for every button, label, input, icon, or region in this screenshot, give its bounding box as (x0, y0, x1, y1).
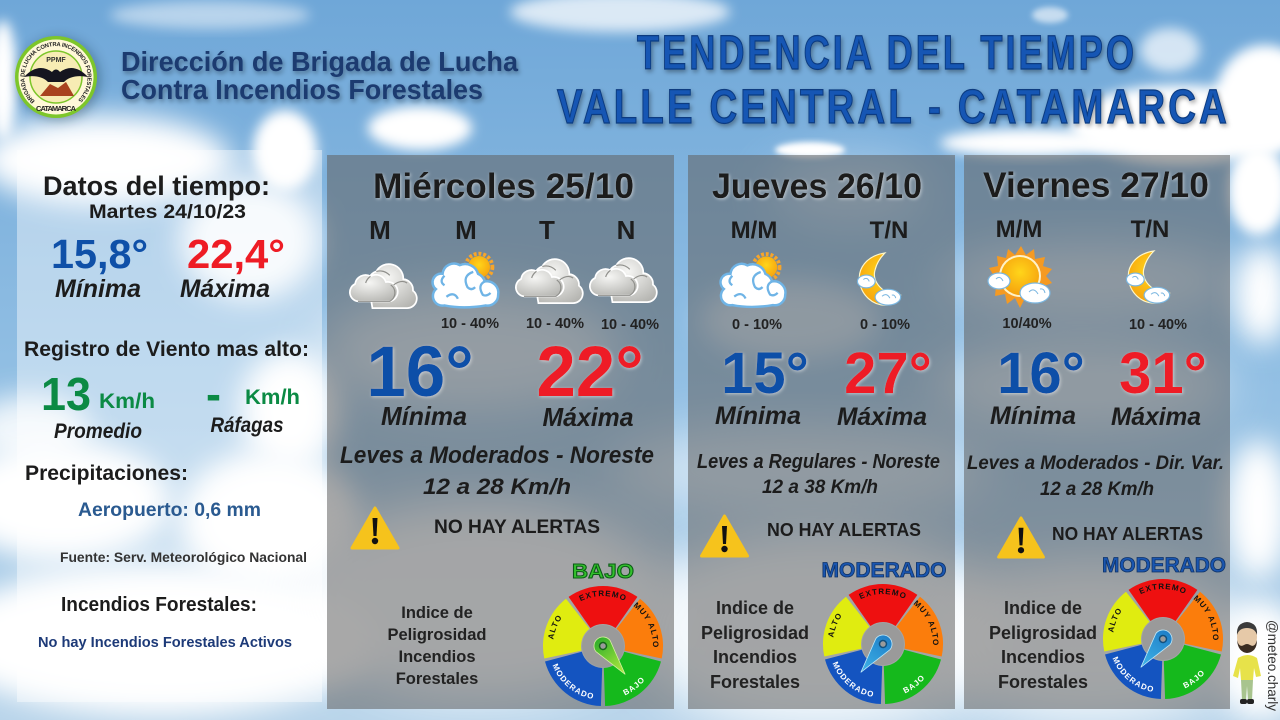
gauge: fire danger (822, 584, 943, 704)
icon: crescent moon (857, 253, 901, 305)
rain probabilities (1002, 316, 1187, 333)
icon: sun behind cloud (721, 254, 785, 307)
wind gusts (206, 368, 300, 437)
logo: brigade emblem: BRIGADA DE LUCHA CONTRA INCENDIOS FORESTALES (20, 42, 92, 104)
minimum temperature: Mínima (990, 402, 1076, 430)
rain probabilities (732, 317, 910, 333)
fire danger label (989, 598, 1097, 692)
icon: cloudy night (590, 258, 657, 302)
panel: Friday background (964, 155, 1230, 709)
wind forecast: 12 a 28 Km/h (423, 474, 571, 499)
wind gusts: - (206, 368, 221, 420)
heading: precipitation: Precipitaciones: (25, 461, 188, 485)
maximum temperature: 31° (1119, 341, 1207, 406)
fire danger label: Incendios (1001, 647, 1085, 667)
fire danger label: Indice de (1004, 598, 1082, 618)
panel: Jueves 26/10 (697, 167, 946, 704)
day heading: Viernes 27/10 (983, 166, 1209, 205)
gauge: fire danger: MODERADO (1112, 656, 1154, 692)
minimum temperature: Mínima (55, 275, 141, 303)
wind forecast: 12 a 38 Km/h (762, 477, 878, 498)
period labels: N (617, 215, 635, 245)
maximum temperature (180, 231, 285, 303)
gauge needle (854, 631, 896, 678)
fire danger label: Indice de (716, 598, 794, 618)
logo: brigade emblem (11, 32, 106, 127)
icon: cloudy morning (350, 264, 417, 308)
rain probabilities: 0 - 10% (732, 317, 782, 333)
gauge: fire danger: EXTREMO (858, 588, 906, 599)
heading: wind record: Registro de Viento mas alto: (24, 337, 309, 361)
panel: Miércoles 25/10 (340, 167, 663, 706)
fire danger label: Forestales (396, 670, 478, 688)
maximum temperature: 22,4° (187, 231, 285, 277)
gauge: fire danger: BAJO (1182, 670, 1204, 688)
period labels: M/M (731, 217, 777, 244)
panel: current weather data (17, 150, 322, 702)
rain probabilities: 0 - 10% (860, 317, 910, 333)
gauge: fire danger: MODERADO (552, 663, 594, 698)
period labels: T/N (1131, 216, 1169, 243)
fire danger label: Peligrosidad (387, 626, 487, 644)
rain probabilities (441, 316, 659, 333)
gauge: fire danger: MUY ALTO (634, 602, 658, 647)
maximum temperature: Máxima (1111, 403, 1201, 431)
panel: Viernes 27/10 (967, 166, 1226, 699)
gauge: fire danger (542, 586, 663, 706)
fire danger label (701, 598, 809, 692)
rain probabilities: 10 - 40% (1129, 317, 1187, 333)
maximum temperature (837, 341, 932, 431)
minimum temperature: Mínima (715, 402, 801, 430)
data source: Fuente: Serv. Meteorológico Nacional (60, 549, 307, 565)
icon: crescent moon (1126, 251, 1170, 303)
maximum temperature: Máxima (542, 402, 634, 432)
wind forecast: Leves a Moderados - Noreste (340, 442, 654, 469)
icon: warning triangle (999, 518, 1043, 557)
rain probabilities: 10 - 40% (526, 316, 584, 332)
gauge: fire danger: MUY ALTO (1194, 595, 1218, 640)
gauge: fire danger: BAJO (622, 678, 644, 696)
icon: cartoon meteorologist (1233, 622, 1261, 704)
gauge needle (1134, 626, 1176, 673)
gauge: fire danger: BAJO (902, 676, 924, 694)
average wind: Km/h (99, 390, 155, 413)
rain probabilities: 10/40% (1002, 316, 1052, 332)
average wind (41, 368, 155, 443)
period labels: M/M (996, 216, 1042, 243)
rain probabilities: 10 - 40% (441, 316, 499, 332)
icon: cloudy afternoon (516, 259, 583, 303)
gauge: fire danger: ALTO (828, 614, 841, 638)
minimum temperature: 15,8° (51, 231, 148, 277)
wind gusts: Km/h (245, 386, 300, 409)
maximum temperature (1111, 341, 1207, 431)
danger level: moderado: MODERADO (822, 559, 946, 582)
fire danger label: Forestales (998, 672, 1088, 692)
heading: organisation name: Dirección de Brigada de Lucha (121, 46, 519, 77)
heading: organisation name (121, 46, 519, 105)
minimum temperature: 15° (721, 341, 809, 406)
heading: forest fires: Incendios Forestales: (61, 594, 257, 616)
minimum temperature (51, 231, 148, 303)
fire danger label: Peligrosidad (989, 623, 1097, 643)
gauge: fire danger: EXTREMO (578, 590, 626, 601)
fire danger label: Incendios (398, 648, 476, 666)
panel: Wednesday background (327, 155, 674, 709)
icon: sun behind cloud (433, 254, 498, 307)
day heading: Jueves 26/10 (712, 167, 922, 206)
active fires statement: No hay Incendios Forestales Activos (38, 634, 292, 651)
period labels (731, 217, 908, 244)
gauge: fire danger: ALTO (548, 616, 561, 640)
maximum temperature: Máxima (837, 403, 927, 431)
fire danger label: Indice de (401, 604, 473, 622)
fire danger label (387, 604, 487, 688)
heading: organisation name: Contra Incendios Forestales (121, 74, 483, 105)
maximum temperature: 22° (536, 333, 644, 412)
logo: brigade emblem: PPMF (46, 57, 66, 64)
wind forecast (340, 442, 654, 499)
minimum temperature (990, 341, 1085, 430)
danger level: bajo: BAJO (572, 561, 634, 583)
title (557, 27, 1230, 134)
wind forecast: 12 a 28 Km/h (1040, 479, 1154, 500)
gauge: fire danger: ALTO (1108, 608, 1121, 632)
minimum temperature: 16° (997, 341, 1085, 406)
icon: warning triangle (352, 508, 398, 548)
icon: warning triangle (702, 516, 748, 556)
minimum temperature (715, 341, 809, 430)
wind forecast (697, 451, 940, 498)
gauge: fire danger: MUY ALTO (914, 600, 938, 645)
period labels (369, 215, 635, 245)
gauge: fire danger: EXTREMO (1138, 584, 1186, 594)
wind forecast: Leves a Regulares - Noreste (697, 451, 940, 473)
average wind: 13 (41, 368, 91, 420)
gauge: fire danger (1102, 579, 1223, 699)
period labels: T (539, 215, 555, 245)
rain probabilities: 10 - 40% (601, 317, 659, 333)
day heading: Miércoles 25/10 (373, 167, 634, 206)
heading: current data: Datos del tiempo: (43, 171, 270, 201)
period labels (996, 216, 1169, 243)
fire danger label: Forestales (710, 672, 800, 692)
fire danger label: Incendios (713, 647, 797, 667)
panel: Thursday background (688, 155, 955, 709)
minimum temperature: Mínima (381, 401, 467, 431)
logo: brigade emblem: CATAMARCA (36, 104, 77, 113)
minimum temperature: 16° (366, 333, 474, 412)
wind forecast: Leves a Moderados - Dir. Var. (967, 452, 1224, 474)
gauge needle (590, 633, 632, 680)
wind gusts: Ráfagas (210, 414, 284, 437)
period labels: M (455, 215, 477, 245)
fire danger label: Peligrosidad (701, 623, 809, 643)
text block: current weather data (24, 171, 309, 651)
maximum temperature: Máxima (180, 275, 270, 303)
alert status: NO HAY ALERTAS (767, 520, 921, 540)
wind forecast (967, 452, 1224, 500)
maximum temperature: 27° (844, 341, 932, 406)
icon: sun with clouds (988, 246, 1052, 308)
danger level: moderado: MODERADO (1102, 554, 1226, 577)
alert status: NO HAY ALERTAS (1052, 524, 1203, 544)
period labels: T/N (870, 217, 908, 244)
alert status: NO HAY ALERTAS (434, 516, 600, 538)
period labels: M (369, 215, 391, 245)
gauge: fire danger: MODERADO (832, 661, 874, 696)
average wind: Promedio (54, 420, 142, 443)
date: Martes 24/10/23 (89, 202, 246, 223)
precipitation value: Aeropuerto: 0,6 mm (78, 500, 261, 521)
